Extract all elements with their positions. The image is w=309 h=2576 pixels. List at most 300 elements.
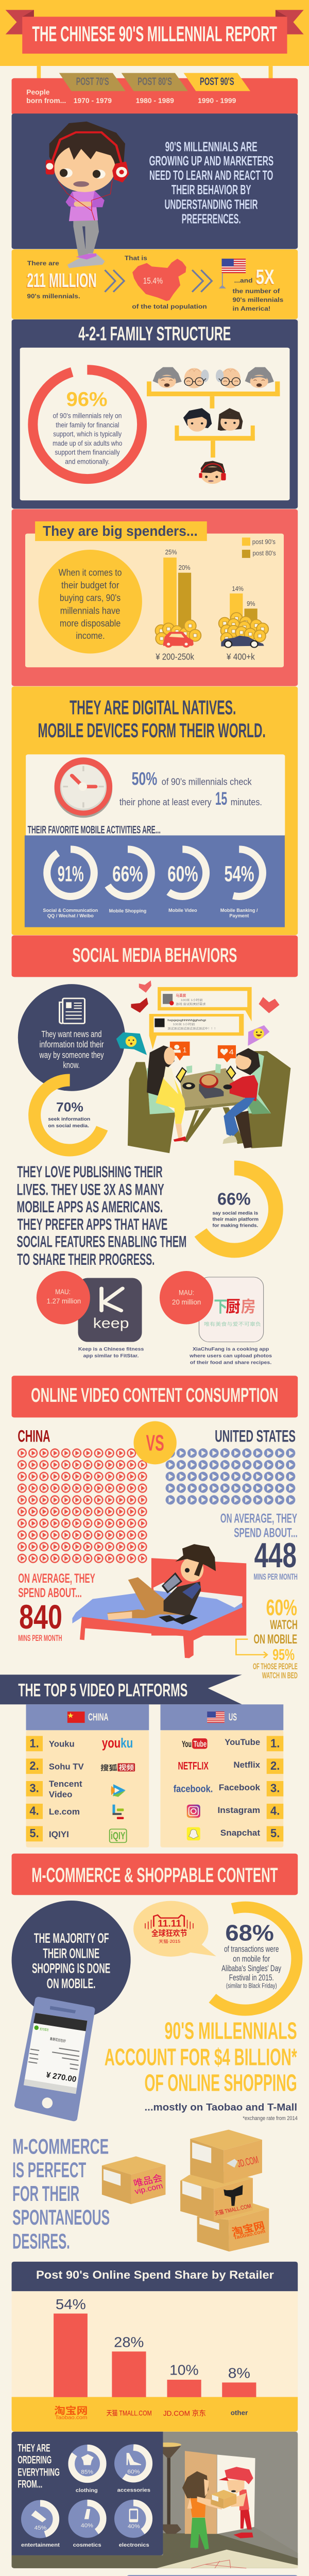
panel: intro (12, 113, 298, 249)
girl (147, 1045, 175, 1098)
stat: 96% text: support them financially (55, 449, 120, 456)
donut: entertainment (21, 2500, 59, 2538)
app: xiachufang: 房 (241, 1298, 255, 1316)
app: keep: 1.27 million (47, 1297, 81, 1306)
illustration: phone with wechat payment: 鲁期花旧包钞 (49, 2037, 66, 2043)
speech bubble: weibo post 2 (149, 1014, 244, 1049)
stat: phone checking (119, 769, 262, 809)
app: xiachufang: 厨 (226, 1298, 241, 1316)
heading: favorite mobile activities: THEIR FAVORITE MOBILE ACTIVITIES ARE... (28, 823, 161, 836)
stat: phone checking: 15 (215, 789, 227, 809)
panel: order categories: THEY ARE (18, 2442, 50, 2454)
chart: online spend share: Post 90's Online Spend Share by Retailer (36, 2268, 274, 2282)
callout: car budget: their budget for (61, 580, 119, 591)
retailer labels: 淘宝网 (54, 2405, 88, 2416)
percentages and labels: Mobile Video (168, 908, 197, 913)
donut: clothing (68, 2445, 106, 2483)
callout: car budget: buying cars, 90's (60, 593, 121, 603)
top yellow header band (0, 0, 309, 66)
platform names: Instagram (217, 1805, 260, 1815)
bar chart: car budgets: 14% (232, 585, 244, 592)
tab: post 90's: POST 90'S (200, 75, 234, 88)
percentages and labels: Social & Communication (43, 908, 98, 913)
donut: electronics (114, 2500, 152, 2538)
icon: clock (55, 757, 112, 818)
panel: digital natives (12, 686, 298, 935)
platform names: Snapchat (220, 1828, 260, 1838)
illustration: phone with wechat payment: ¥ 270.00 (45, 2070, 77, 2084)
logo: snapchat (187, 1827, 200, 1840)
table: china platforms: 4. (29, 1805, 39, 1818)
donut icons and values: 40% (81, 2523, 93, 2529)
illustration: friends dining with phones (128, 1045, 290, 1153)
stat: 66% text (212, 1190, 259, 1228)
logo: youtube (182, 1738, 208, 1749)
percentages and labels (43, 861, 258, 919)
intro statement (149, 139, 273, 226)
logo: instagram (187, 1805, 200, 1818)
stat: china viewing minutes (18, 1571, 95, 1643)
speech bubble: singles day logo: 天猫·2015 (159, 1938, 180, 1944)
stat: 70% text (48, 1100, 90, 1129)
panel: order categories: electronics (119, 2543, 149, 2548)
logo: facebook: facebook. (174, 1783, 213, 1794)
logo: sohu video: 搜狐 (100, 1764, 117, 1772)
callout: majority on mobile: SHOPPING IS DONE (32, 1961, 110, 1976)
banner: top 5 video platforms (0, 1674, 242, 1704)
platform names: Youku (49, 1739, 75, 1749)
callout: majority on mobile (12, 1901, 131, 2020)
callout: news circle: know. (63, 1060, 80, 1070)
bar labels: price ranges (155, 652, 255, 662)
statement: publishing their lives: THEY PREFER APPS THAT HAVE (18, 1216, 167, 1233)
speech bubble: singles day logo: 11.11 (158, 1919, 181, 1929)
icons: coins and red car (156, 620, 201, 648)
map of china with percentage: 15.4% (143, 276, 163, 285)
statement: m-commerce spontaneous: DESIRES. (12, 2230, 70, 2253)
stat: 66% text: say social media is (212, 1211, 258, 1215)
callout: news circle (18, 984, 125, 1091)
statement: 4 billion (105, 2018, 297, 2096)
app: xiachufang: MAU: (179, 1289, 194, 1297)
table: us platforms (160, 1704, 283, 1848)
app: keep: keep (93, 1315, 129, 1331)
notification badge: likes: 4 (229, 1048, 234, 1056)
illustration: boy with headphones (46, 122, 129, 268)
panel: order categories: accessories (117, 2487, 150, 2493)
tab: post 80's (122, 73, 188, 91)
panel: population stats (12, 249, 298, 319)
stat: 5x: 5X (255, 267, 274, 290)
speech bubble: weibo post 2: hsjsjejsghhhhhjjghshgi (167, 1019, 206, 1022)
donut: 54% mobile banking (215, 849, 263, 896)
platform names: Facebook (219, 1783, 260, 1792)
stat: phone checking: their phone at least every (119, 797, 212, 808)
video grid: united states (165, 1447, 296, 1506)
panel: order categories: entertainment (21, 2543, 60, 2548)
bar labels: price ranges: ¥ 400+k (226, 652, 255, 662)
stat: 211 million: 90's millennials. (27, 293, 80, 300)
callout: majority on mobile: THEIR ONLINE (43, 1946, 99, 1961)
retailer labels (54, 2405, 248, 2421)
stat: watch on mobile (236, 1595, 298, 1680)
tab: post 70's: POST 70'S (76, 75, 109, 88)
stat: 96% text: of 90's millennials rely on (53, 412, 122, 420)
panel: generations (12, 73, 298, 115)
panel: big spenders (12, 509, 298, 686)
percentages and labels: Mobile Shopping (109, 908, 146, 914)
speech bubble: weibo post 1: 游戏 尝试和美好需求 (176, 1002, 206, 1006)
panel: order categories: cosmetics (73, 2543, 101, 2548)
retailer labels: 天猫 TMALL.COM (107, 2409, 152, 2417)
percentages and labels: QQ / Wechat / Weibo (47, 913, 94, 919)
platform names: IQIYI (49, 1829, 69, 1839)
speech bubble: singles day logo: 全球狂欢节 (151, 1928, 187, 1938)
box: taobao (197, 2204, 269, 2251)
percentages and labels: 54% (224, 861, 254, 886)
logo: sohu video (100, 1764, 135, 1772)
donut: 96% (33, 370, 142, 479)
panel: order categories: EVERYTHING (18, 2466, 60, 2478)
icons: parents (183, 408, 243, 432)
icons: coins and sports car (219, 613, 268, 648)
icon: child with headphones (199, 461, 226, 484)
birth year labels: People (26, 89, 49, 96)
logo: sohu video: 视频 (118, 1764, 134, 1772)
panel: mobile activities (25, 836, 285, 927)
table: us platforms: 5. (270, 1827, 280, 1840)
box: vip.com: vip.com (134, 2182, 164, 2196)
speech bubble: emoji left (116, 1032, 147, 1055)
speech bubble: singles day logo (133, 1901, 216, 1957)
box: jd.com (190, 2130, 262, 2183)
statement: publishing their lives: THEY LOVE PUBLISHING THEIR (17, 1163, 163, 1181)
title banner (22, 16, 287, 54)
app descriptions (78, 1347, 272, 1365)
stat: phone checking: 50% (132, 769, 157, 789)
icons: hearts (131, 980, 280, 1013)
callout: car budget (39, 550, 142, 653)
vs badge: VS (146, 1430, 164, 1455)
donut: 91% mobile social (47, 849, 94, 896)
speech bubble: weibo post 1: 马美宸 (176, 993, 186, 997)
stat: 66% text: their main platform (212, 1217, 259, 1222)
woman (182, 2471, 222, 2550)
platform names (49, 1739, 84, 1839)
platform names: Video (49, 1789, 72, 1799)
callout: car budget: millennials have (60, 606, 120, 616)
percentages and labels: 66% (112, 861, 143, 886)
statement: publishing their lives: LIVES. THEY USE 3X AS MANY (17, 1181, 164, 1199)
box: vip.com (102, 2156, 165, 2204)
statement: publishing their lives: MOBILE APPS AS AMERICANS. (17, 1198, 163, 1216)
notification badge: likes (218, 1045, 236, 1062)
box: vip.com: 唯品会 (132, 2173, 164, 2189)
box: tmall (180, 2171, 253, 2221)
app: keep: MAU: (55, 1288, 71, 1296)
icon: china flag (67, 1711, 85, 1723)
bar values: 8% (228, 2365, 250, 2381)
icon: newspaper (60, 998, 85, 1024)
stat: phone checking: of 90's millennials check (162, 776, 252, 787)
retailer labels: JD.COM 京东 (163, 2410, 206, 2418)
statement: m-commerce spontaneous: M-COMMERCE (12, 2135, 109, 2159)
stat: 68% text: Festival in 2015. (229, 1973, 274, 1982)
donut: accessories (114, 2444, 152, 2482)
statement: m-commerce spontaneous: FOR THEIR (12, 2182, 79, 2206)
table: china platforms: 3. (29, 1782, 39, 1795)
map of china with percentage (125, 255, 207, 310)
stat: 66% text: 66% (217, 1190, 251, 1209)
table: us platforms: 2. (270, 1759, 280, 1773)
table: us platforms: 3. (270, 1782, 280, 1795)
icons: grandparents (153, 367, 274, 388)
bar values: 10% (169, 2362, 199, 2378)
table: china platforms (26, 1704, 149, 1848)
stat: china viewing minutes: SPEND ABOUT... (18, 1586, 82, 1600)
box: taobao: 淘宝网 (230, 2219, 266, 2238)
donut icons and values (31, 2453, 141, 2531)
stat: watch on mobile: 95% (272, 1646, 295, 1663)
donut: 60% mobile video (159, 849, 206, 896)
stat: 5x: the number of (233, 287, 280, 295)
bars (54, 2314, 256, 2397)
panel: order categories: clothing (76, 2488, 98, 2494)
heading: branded content (127, 2575, 298, 2576)
heading tag: They are big spenders... (43, 523, 198, 539)
callout: car budget: income. (76, 631, 105, 641)
illustration: phone with wechat payment: 支付成功 (39, 2027, 49, 2032)
stat: 96% text: and emotionally. (65, 457, 110, 466)
speech bubble: weibo post 2: 测试测试测试测试测试测试中！！！ (167, 1027, 217, 1030)
stat: 211 million: 211 MILLION (27, 269, 96, 292)
map of china with percentage: That is (125, 255, 147, 262)
panel: 4-2-1 family structure (12, 319, 298, 509)
stat: 211 million: 211 MILLION (26, 270, 96, 293)
platform names: Tencent (49, 1779, 82, 1789)
donut: cosmetics (68, 2500, 106, 2538)
statement: publishing their lives: TO SHARE THEIR PROGRESS. (17, 1251, 154, 1269)
stat: us viewing minutes (220, 1511, 298, 1582)
table: china platforms: 2. (29, 1759, 39, 1773)
logo: tencent video (111, 1784, 126, 1797)
logo: iqiyi: iQIY (111, 1830, 126, 1842)
logo: youtube: You (182, 1739, 192, 1749)
table: china platforms: CHINA (88, 1711, 109, 1723)
banner: social media behaviors (12, 936, 298, 977)
stat: china viewing minutes: 840 (19, 1598, 62, 1636)
birth year labels (26, 89, 236, 105)
stat: 70% text: 70% (56, 1100, 83, 1114)
bar values (56, 2296, 250, 2381)
logo: youku: you (102, 1736, 121, 1751)
statement: m-commerce spontaneous: IS PERFECT (12, 2158, 86, 2182)
panel: order categories: FROM... (18, 2478, 42, 2490)
percentages and labels: 91% (58, 861, 84, 886)
bar chart: car budgets: 20% (179, 564, 191, 571)
bar chart: car budgets (163, 549, 258, 629)
stat: 5x: 90's millennials (233, 296, 283, 303)
stat: 96% text (53, 387, 122, 466)
stat: 5x: 5X (256, 266, 274, 289)
bar values: 54% (56, 2296, 86, 2312)
app: xiachufang: 唯有美食与爱不可辜负 (204, 1321, 261, 1327)
box: tmall: 天猫 TMALL.COM (214, 2203, 252, 2217)
table: us platforms: US (229, 1711, 237, 1723)
lamp (153, 2443, 181, 2534)
heading: china: CHINA (18, 1427, 50, 1446)
donut icons and values: 45% (35, 2525, 46, 2531)
icon: us flag on pole (219, 259, 246, 289)
callout: majority on mobile: THE MAJORITY OF (34, 1931, 109, 1946)
tab: post 70's (59, 73, 126, 91)
legend: post 90's (252, 538, 276, 546)
chart: online spend share (12, 2262, 298, 2432)
logo: youtube: Tube (194, 1739, 207, 1749)
stat: 68% text (221, 1920, 281, 1990)
table: china platforms: 1. (29, 1737, 39, 1750)
app: xiachufang: 下 (214, 1298, 228, 1316)
donut icons and values: 60% (127, 2469, 140, 2475)
platform names: YouTube (225, 1737, 260, 1747)
donut: 70% (35, 1080, 105, 1150)
speech bubble: weibo post 2: 100米 1小时前 (173, 1022, 195, 1026)
retailer labels: other (231, 2409, 248, 2416)
illustration: phone with wechat payment (18, 2000, 92, 2119)
banner: m-commerce (12, 1854, 298, 1895)
callout: majority on mobile: ON MOBILE. (47, 1976, 96, 1992)
map of china with percentage: of the total population (132, 303, 207, 310)
panel: order categories: ORDERING (18, 2454, 52, 2466)
birth year labels: 1970 - 1979 (74, 97, 112, 105)
banner: online video (12, 1376, 298, 1417)
stat: 5x: in America! (233, 305, 270, 312)
stat: 68% text: (similar to Black Friday) (226, 1982, 277, 1990)
notification badge: followers (170, 1042, 190, 1061)
video grid: china (16, 1447, 148, 1564)
stat: 96% text: 96% (66, 387, 108, 410)
donut: 66% (193, 1168, 276, 1250)
table: us platforms: 1. (270, 1737, 280, 1750)
statement: publishing their lives (17, 1163, 186, 1269)
birth year labels: 1990 - 1999 (198, 97, 236, 105)
logo: netflix: NETFLIX (178, 1760, 209, 1772)
stat: 96% text: their family for financial (56, 421, 119, 429)
stat: 68% text: 68% (225, 1920, 274, 1945)
table: us platforms: 4. (270, 1805, 280, 1818)
illustration: courier delivering package (12, 2432, 298, 2568)
speech bubble: weibo post 1: 100米 1小时前 (181, 998, 203, 1002)
logo: iqiyi (110, 1829, 127, 1842)
table: china platforms: 5. (29, 1827, 39, 1840)
app: xiachufang (160, 1271, 264, 1342)
stat: 211 million (26, 260, 96, 300)
stat: 5x: ...and (234, 277, 253, 284)
package (211, 2490, 236, 2509)
stat: 96% text: made up of six adults who (53, 439, 122, 448)
stat: 96% text: support, which is typically (53, 430, 122, 438)
stat: phone checking: minutes. (231, 797, 262, 808)
platform names: Sohu TV (49, 1761, 84, 1771)
birth year labels: 1980 - 1989 (136, 97, 174, 105)
speech bubble: emoji right (248, 1025, 269, 1046)
stat: china viewing minutes: MINS PER MONTH (18, 1633, 62, 1643)
platform names (217, 1737, 260, 1838)
logo: le.com (112, 1805, 124, 1819)
callout: news circle: They want news and (41, 1029, 101, 1039)
stat: 70% text: seek information (48, 1116, 90, 1122)
app: xiachufang: 20 million (172, 1298, 201, 1307)
app: keep (37, 1271, 142, 1342)
rank cells (26, 1736, 43, 1841)
platform names: Le.com (49, 1807, 80, 1817)
bar labels: price ranges: ¥ 200-250k (155, 652, 194, 662)
note: taobao and tmall: ...mostly on Taobao and T-Mall (144, 2102, 297, 2113)
speech bubble: weibo post 1 (158, 987, 252, 1022)
courier (219, 2467, 253, 2538)
callout: news circle: way by someone they (39, 1050, 104, 1060)
box: taobao: Taobao.com (233, 2228, 266, 2241)
percentages and labels: Mobile Banking / (220, 908, 258, 913)
stat: 66% text: for making friends. (212, 1223, 258, 1228)
app descriptions: XiaChuFang is a cooking app (193, 1347, 269, 1352)
donut icons and values: 40% (128, 2524, 140, 2530)
legend (242, 537, 276, 558)
bar values: 28% (114, 2334, 144, 2350)
rank cells (267, 1736, 283, 1841)
illustration: person watching tablet in bed (72, 1544, 246, 1658)
callout: news circle: information told their (40, 1039, 104, 1049)
food and phones (176, 1068, 186, 1082)
birth year labels: born from... (26, 97, 66, 105)
bar chart: car budgets: 9% (247, 600, 255, 607)
logo: youku: ku (121, 1736, 133, 1751)
platform names: Netflix (233, 1760, 260, 1770)
stat: 211 million: There are (27, 260, 59, 267)
statement: m-commerce spontaneous (12, 2135, 110, 2253)
stat: 5x (233, 266, 283, 312)
tab: post 80's: POST 80'S (138, 75, 172, 88)
panel: order categories (12, 2432, 163, 2555)
callout: car budget: When it comes to (59, 568, 122, 578)
app descriptions: where users can upload photos (189, 1353, 272, 1359)
intro statement: PREFERENCES. (182, 211, 241, 226)
stat: 68% text: on mobile for (233, 1954, 270, 1963)
app descriptions: Keep is a Chinese fitness (78, 1347, 144, 1352)
percentages and labels: Payment (229, 913, 249, 919)
legend: post 80's (253, 550, 276, 557)
boy (236, 1048, 260, 1075)
app descriptions: of their food and share recipes. (190, 1360, 271, 1365)
callout: car budget: more disposable (60, 618, 121, 629)
statement: m-commerce spontaneous: SPONTANEOUS (12, 2206, 110, 2230)
donut: 68% (183, 1896, 308, 2021)
retailer labels: Taobao.com (55, 2415, 88, 2421)
app descriptions: app similar to FitStar. (83, 1353, 139, 1359)
stat: 68% text: of transactions were (224, 1944, 279, 1954)
tab: post 90's (184, 73, 250, 91)
bar chart: car budgets: 25% (165, 549, 177, 556)
donut: 66% mobile shopping (104, 849, 151, 896)
stat: 70% text: on social media. (48, 1123, 89, 1129)
arrows: chevrons left (105, 270, 124, 292)
family tree connectors (147, 381, 280, 457)
box: jd.com: JD.COM (236, 2154, 260, 2170)
note: taobao and tmall (144, 2102, 298, 2122)
donut icons and values: 85% (81, 2469, 93, 2475)
percentages and labels: 60% (167, 861, 198, 886)
notification badge: followers: 1 (183, 1046, 186, 1054)
